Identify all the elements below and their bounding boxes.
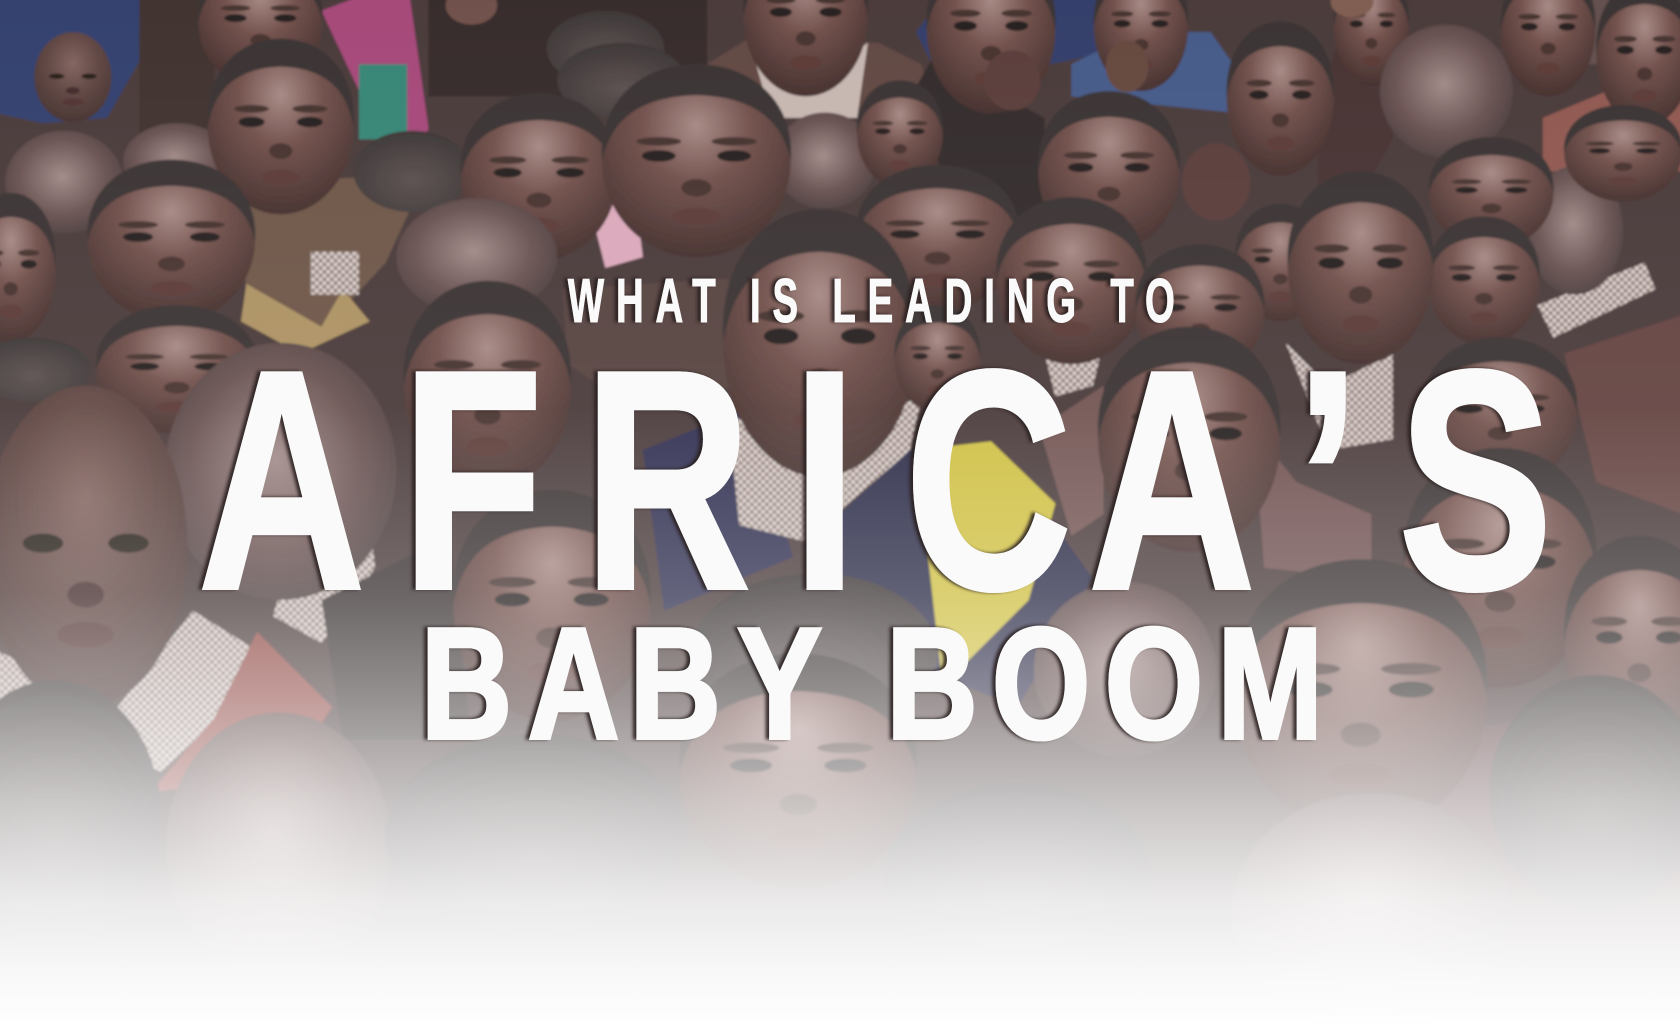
kicker: what is leading to: WHAT IS LEADING TO <box>568 266 1175 335</box>
headline: Baby Boom: BABY BOOM <box>421 596 1323 772</box>
middle row of faces <box>0 209 1597 707</box>
title <box>198 266 1553 772</box>
upper row of faces <box>0 21 1680 377</box>
back row of heads <box>5 0 1680 321</box>
lower rows of faces and heads fading out <box>0 490 1680 1023</box>
headline: Africa's: AFRICA’S <box>198 307 1553 655</box>
